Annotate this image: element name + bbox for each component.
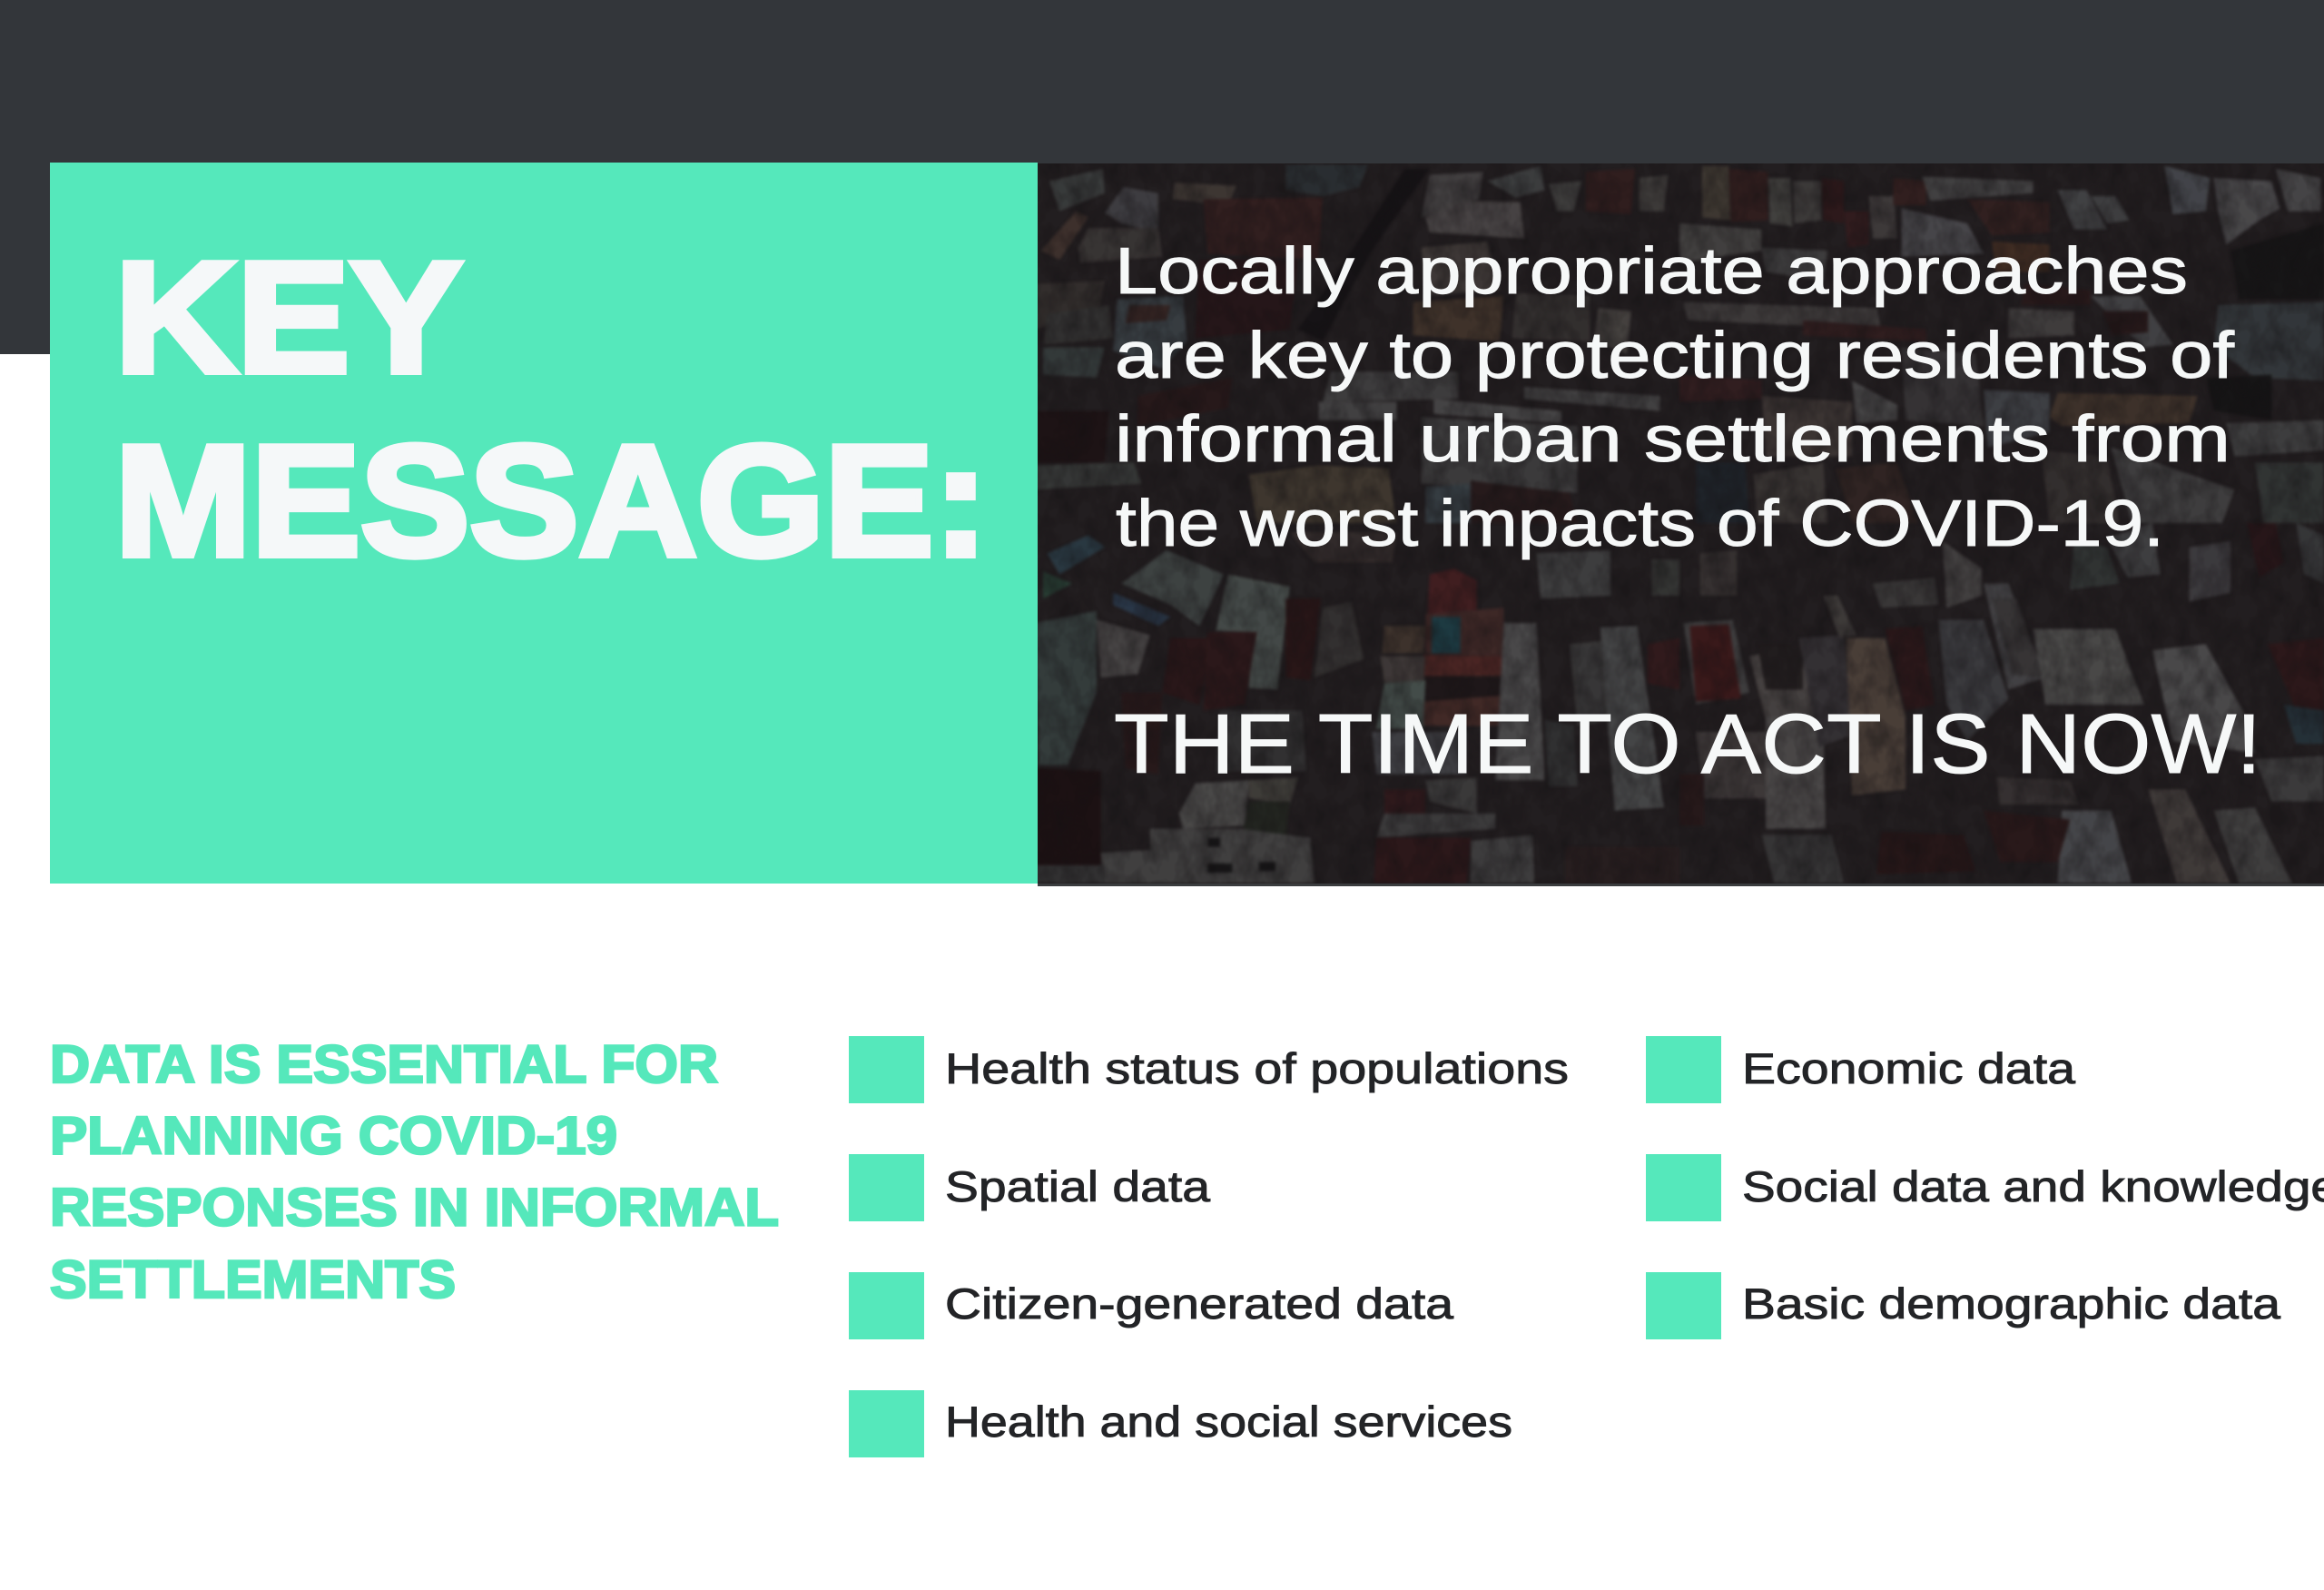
list item: basic demographic data: Basic demographic data bbox=[1742, 1280, 2281, 1328]
list item: spatial data: Spatial data bbox=[945, 1163, 1211, 1211]
icon: square bullet citizen bbox=[849, 1272, 924, 1339]
title: KEY MESSAGE bbox=[114, 229, 988, 588]
heading: data is essential: PLANNING COVID-19 bbox=[50, 1106, 617, 1166]
heading: data is essential bbox=[50, 1035, 779, 1309]
icon: square bullet health services bbox=[849, 1390, 924, 1457]
heading: data is essential: SETTLEMENTS bbox=[50, 1250, 456, 1309]
title: KEY MESSAGE: MESSAGE: bbox=[114, 412, 988, 588]
panel: key message teal block bbox=[50, 163, 1038, 884]
icon: square bullet spatial bbox=[849, 1154, 924, 1221]
list item: social data and knowledge: Social data and knowledge bbox=[1742, 1163, 2324, 1211]
text block: key message statement: informal urban settlements from bbox=[1115, 403, 2230, 476]
title: KEY MESSAGE: KEY bbox=[114, 229, 463, 405]
text block: key message statement bbox=[1115, 235, 2235, 560]
panel: city photo background bbox=[1035, 160, 2324, 886]
list item: health and social services: Health and social services bbox=[945, 1398, 1512, 1447]
list item: economic data: Economic data bbox=[1742, 1045, 2076, 1093]
list: data types column one bbox=[849, 1036, 1569, 1457]
list item: citizen-generated data: Citizen-generated data bbox=[945, 1280, 1454, 1328]
text block: key message statement: Locally appropriate approaches bbox=[1115, 235, 2188, 308]
photo darkening overlay bbox=[1038, 160, 2324, 886]
icon: square bullet health status bbox=[849, 1036, 924, 1103]
dark header band bbox=[0, 0, 2324, 354]
callout: the time to act is now: THE TIME TO ACT IS NOW! bbox=[1114, 696, 2261, 791]
list: data types column two bbox=[1646, 1036, 2324, 1339]
icon: square bullet demographic bbox=[1646, 1272, 1721, 1339]
text block: key message statement: the worst impacts of COVID-19. bbox=[1116, 488, 2164, 560]
icon: square bullet economic bbox=[1646, 1036, 1721, 1103]
photo texture bbox=[1038, 160, 2324, 886]
heading: data is essential: RESPONSES IN INFORMAL bbox=[50, 1179, 779, 1237]
heading: data is essential: DATA IS ESSENTIAL FOR bbox=[50, 1035, 718, 1094]
list item: health status: Health status of populations bbox=[945, 1045, 1569, 1093]
text block: key message statement: are key to protecting residents of bbox=[1115, 320, 2235, 392]
icon: square bullet social bbox=[1646, 1154, 1721, 1221]
